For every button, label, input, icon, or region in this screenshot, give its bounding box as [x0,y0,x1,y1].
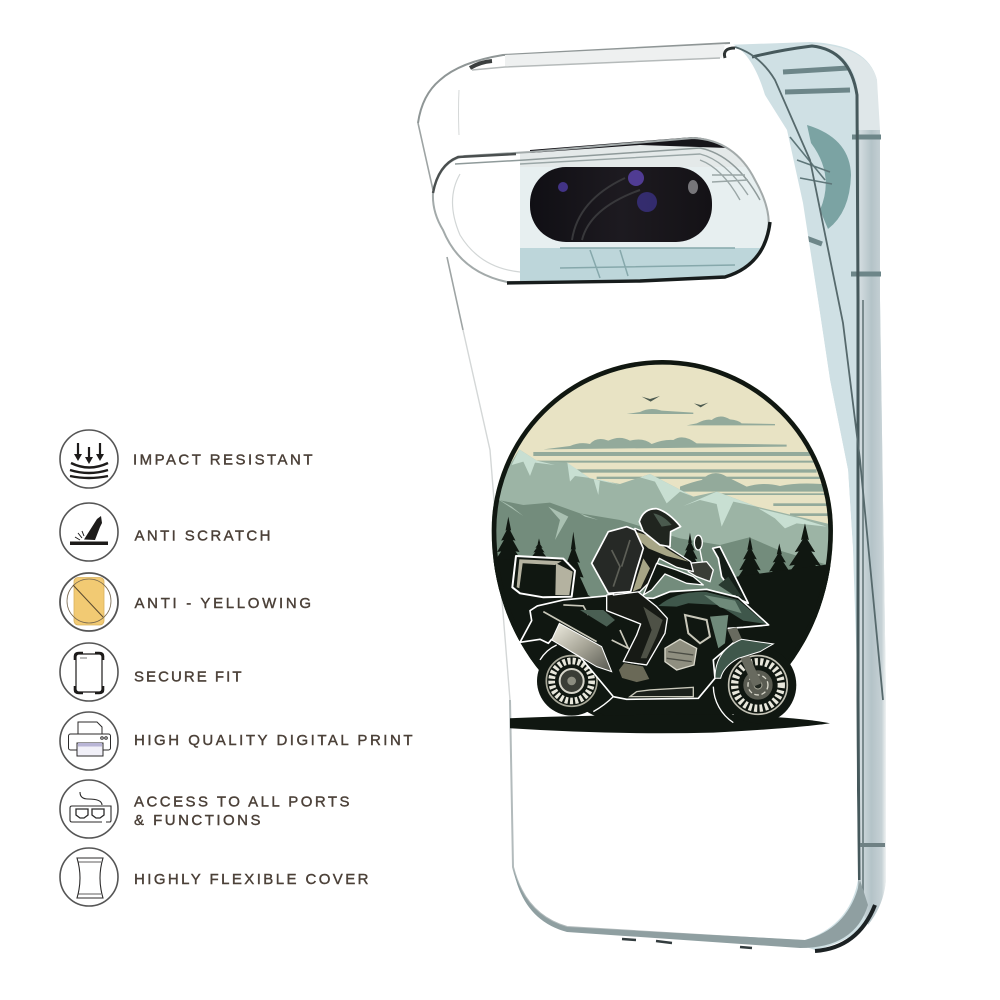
exhaust [552,623,612,672]
label: HIGHLY FLEXIBLE COVER [134,871,369,888]
disc border [492,360,833,732]
birds [642,396,708,407]
label: ANTI - YELLOWING [134,595,311,612]
motorcycle [512,509,796,723]
label: IMPACT RESISTANT [133,452,312,468]
bottom rim [513,867,868,948]
label: HIGH QUALITY DIGITAL PRINT [134,732,412,749]
windscreen [713,547,748,603]
label: SECURE FIT [134,668,242,686]
mirror and hand controls [688,535,713,582]
icon: yellow card [60,573,118,631]
feature: anti scratch [60,503,270,561]
top box [512,556,575,597]
label: ANTI SCRATCH [134,528,270,544]
backpack [592,527,643,593]
label: & FUNCTIONS [134,812,260,829]
icon: ports [60,780,118,838]
icon: phone with bumpers [60,643,118,701]
rider legs [607,591,667,665]
fork [727,627,762,687]
camera cutout with lens [433,130,780,290]
icon: printer [60,712,118,770]
phone body behind the clear case [725,42,886,950]
motorcycle adventure print [492,360,833,734]
rear wheel [537,645,613,716]
front mountains [490,498,833,683]
magnetic ring [807,125,851,229]
pine trees [492,517,828,594]
engine [665,639,697,670]
label [134,794,350,829]
feature: access to all ports [60,780,350,838]
front wheel [713,647,796,723]
lens bar [530,167,712,242]
clear case back with white print area [418,43,883,951]
icon: bent cover [60,848,118,906]
helmet [639,509,681,547]
feature: anti yellowing [60,573,311,631]
feature: highly flexible cover [60,848,369,906]
boot [618,663,650,683]
ground shadow [510,714,830,733]
feature list [60,430,412,906]
feature: high quality digital print [60,712,412,770]
feature: impact resistant [60,430,312,488]
label: ACCESS TO ALL PORTS [134,794,350,810]
rider torso [613,528,693,595]
icon: impact arrows [60,430,118,488]
snow caps [512,449,827,528]
clouds and sky stripes [533,409,837,516]
dark ground [494,560,831,716]
feature: secure fit [60,643,242,701]
back mountains [490,449,833,650]
bike body [520,589,769,699]
landscape disc [492,360,833,716]
icon: blade scratching surface [60,503,118,561]
